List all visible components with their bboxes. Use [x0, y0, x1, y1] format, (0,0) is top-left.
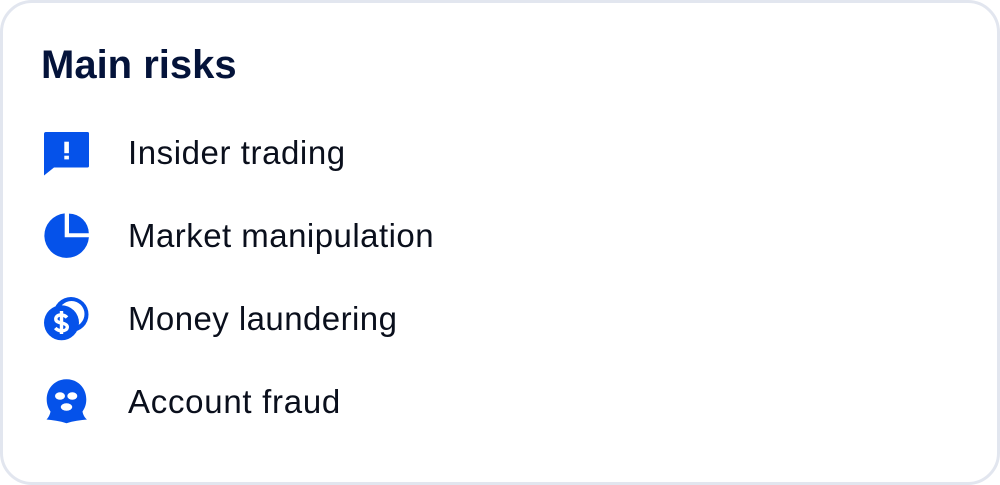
- list item: Account fraud: Account fraud: [128, 383, 341, 420]
- icon: alert speech bubble: [44, 132, 89, 176]
- icon: pie chart: [44, 213, 89, 258]
- icon: balaclava mask: [46, 379, 87, 423]
- heading: Main risks: Main risks: [41, 43, 237, 87]
- list item: Insider trading: Insider trading: [128, 134, 346, 171]
- icon: coins with dollar sign: [44, 297, 88, 340]
- list item: Market manipulation: Market manipulation: [128, 217, 434, 254]
- list item: Money laundering: Money laundering: [128, 300, 397, 337]
